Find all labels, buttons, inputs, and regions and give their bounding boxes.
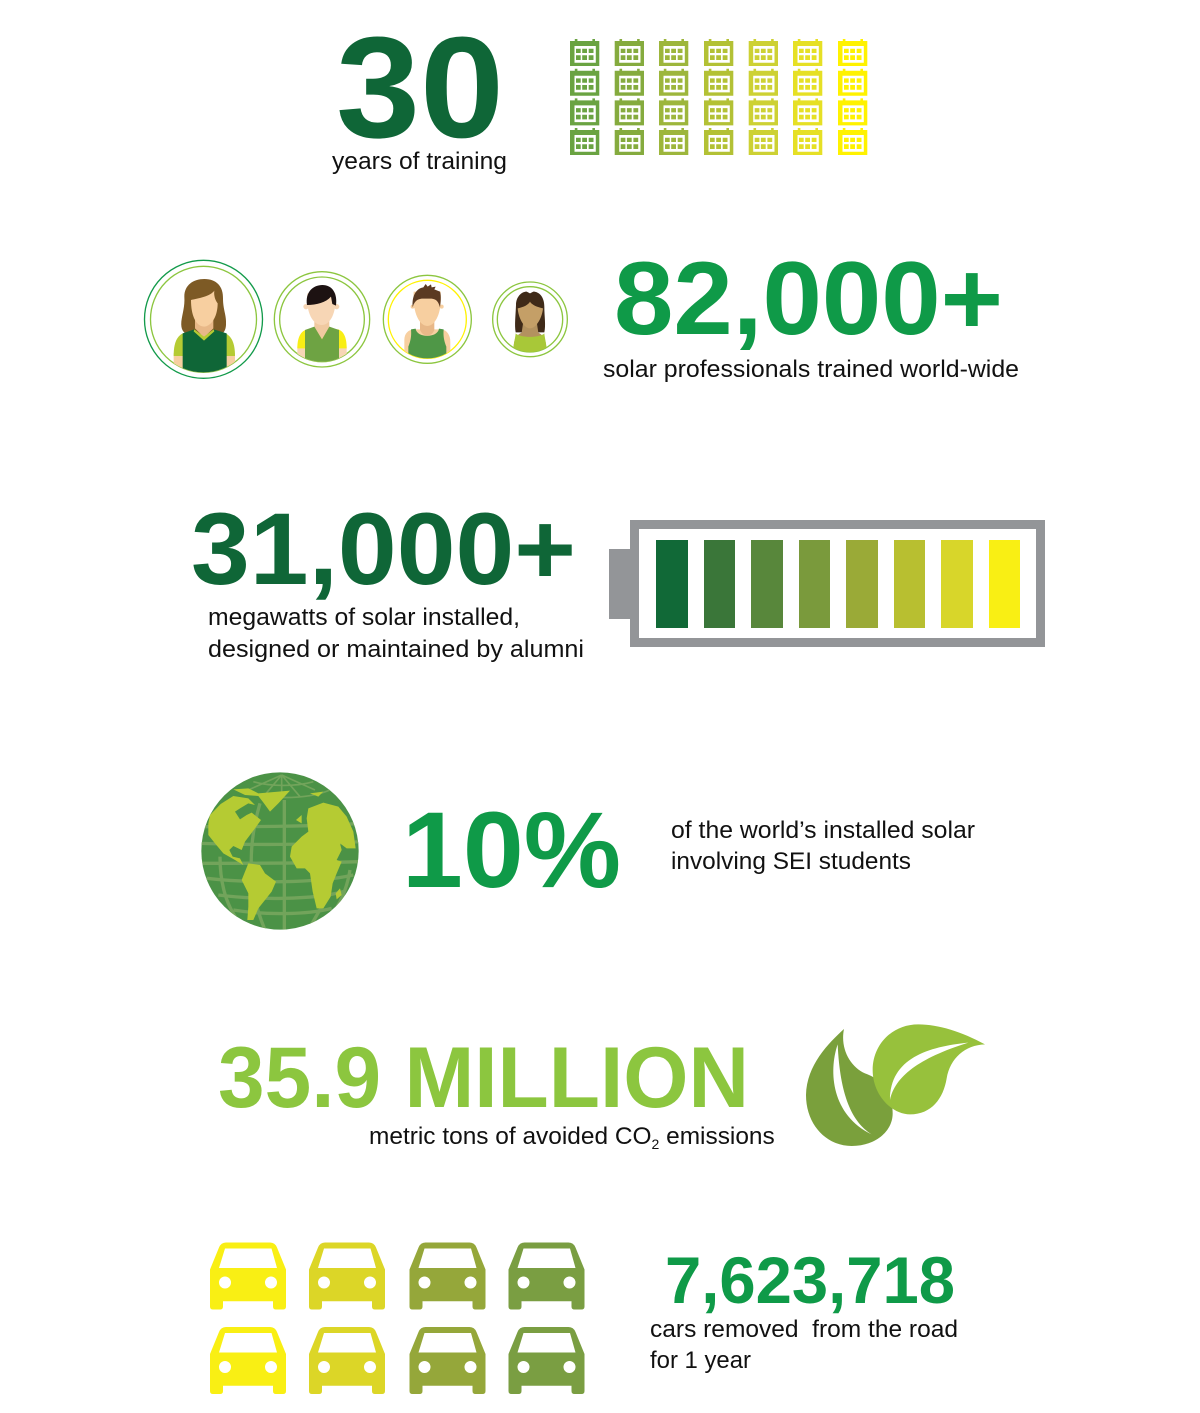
section: solar professionals trained — [144, 260, 1018, 382]
heading: 7,623,718: 7,623,718 — [665, 1243, 955, 1317]
text block: world share description — [671, 817, 975, 875]
icon group: four people avatars — [144, 260, 567, 378]
avatar: woman with dark hair — [493, 282, 567, 357]
text block: world share description: involving SEI students — [671, 848, 911, 875]
text block: megawatts description: megawatts of solar installed, — [208, 604, 520, 631]
section: years of training — [332, 7, 867, 175]
heading: 31,000+: 31,000+ — [191, 492, 576, 606]
section: cars removed — [210, 1242, 958, 1394]
heading: 35.9 MILLION: 35.9 MILLION — [218, 1030, 749, 1126]
caption: avoided CO2 emissions: metric tons of avoided CO — [369, 1123, 652, 1150]
section: avoided emissions — [218, 1024, 985, 1152]
caption: avoided CO2 emissions: emissions — [659, 1123, 775, 1150]
text block: megawatts description — [208, 604, 584, 663]
avatar: man with spiky hair — [383, 275, 471, 363]
heading: 82,000+: 82,000+ — [614, 241, 1003, 357]
avatar: woman with long brown hair — [144, 260, 262, 378]
heading: 10%: 10% — [402, 789, 621, 910]
text block: world share description: of the world’s installed solar — [671, 817, 975, 844]
icon: globe — [200, 772, 360, 933]
section: megawatts installed — [191, 492, 1040, 663]
caption: solar professionals: solar professionals trained world-wide — [603, 356, 1019, 383]
text block: megawatts description: designed or maintained by alumni — [208, 636, 584, 663]
text block: cars description — [650, 1316, 958, 1374]
caption: avoided CO2 emissions: 2 — [652, 1136, 660, 1152]
icon: two leaves — [806, 1024, 985, 1146]
text block: cars description: for 1 year — [650, 1347, 751, 1374]
icon: battery — [609, 524, 1040, 642]
caption: years of training: years of training — [332, 148, 507, 175]
heading: 30: 30 — [336, 7, 504, 168]
icon grid: calendars — [570, 39, 867, 155]
section: share of world solar — [200, 772, 975, 933]
icon grid: cars — [210, 1242, 584, 1394]
text block: cars description: cars removed from the road — [650, 1316, 958, 1343]
avatar: man with black hair — [274, 272, 370, 367]
